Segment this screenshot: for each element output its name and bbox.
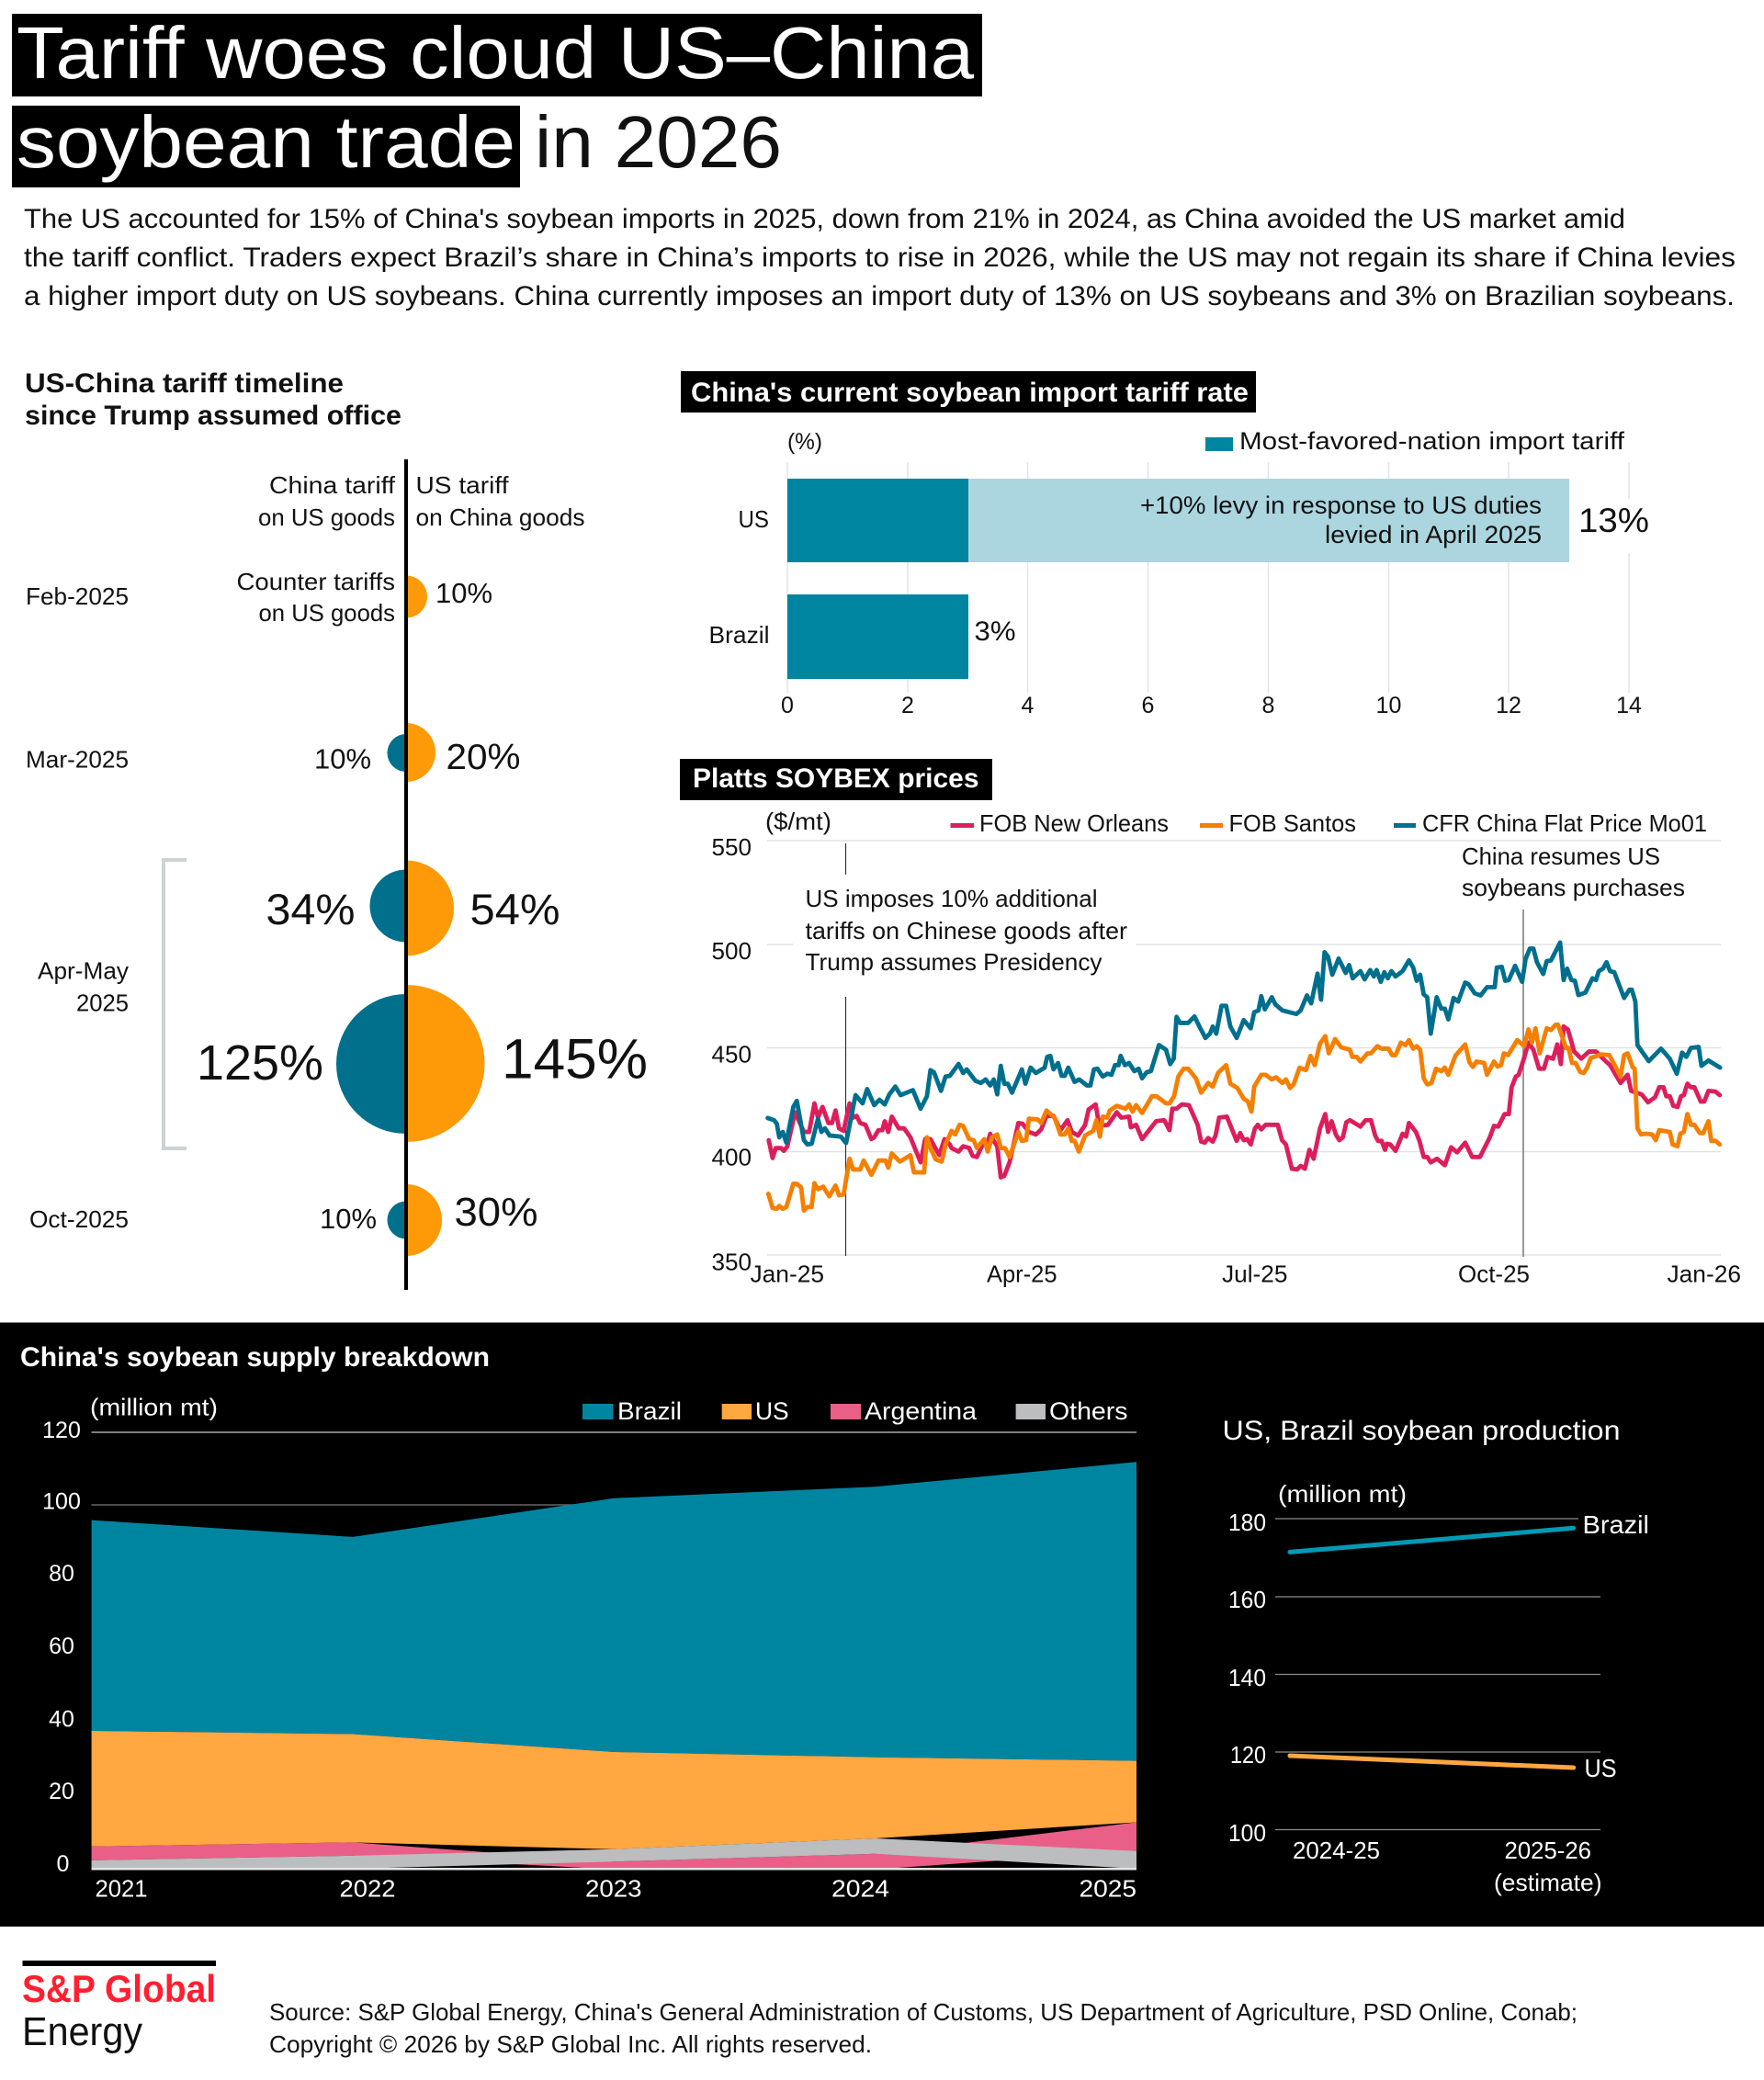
y axis labels: 350: [711, 1248, 752, 1275]
y axis labels: production: 120: [1230, 1741, 1266, 1769]
y axis labels: supply: 120: [42, 1418, 81, 1443]
marker: October: [1522, 910, 1524, 1257]
x axis labels: years: 2025: [1079, 1874, 1136, 1902]
percent values: 20%: [447, 738, 520, 777]
column headers: China tariff: [269, 471, 396, 499]
legend: price series: [950, 809, 1707, 837]
annotation: China resumes purchases: China resumes US: [1462, 842, 1660, 870]
x axis labels: Jul-25: [1222, 1260, 1288, 1288]
timeline axis: [404, 459, 408, 1290]
y axis labels: production: 100: [1228, 1819, 1266, 1847]
panel: import tariff rate bar chart: [681, 371, 1649, 718]
title: [12, 12, 982, 187]
series labels: [1582, 1510, 1649, 1782]
x axis labels: 14: [1616, 693, 1642, 718]
y axis labels: 500: [711, 937, 752, 965]
category labels: Brazil: [709, 621, 770, 649]
x axis labels: Jan-25: [750, 1260, 824, 1288]
x axis labels: Oct-25: [1458, 1260, 1530, 1288]
bar: US: [787, 479, 1569, 562]
x axis labels: 8: [1262, 693, 1274, 718]
timeline heading: US-China tariff timeline: [25, 368, 344, 399]
production chart: [1222, 1416, 1649, 1896]
bar annotation: [1140, 492, 1542, 548]
percent values: 145%: [502, 1027, 648, 1090]
x axis labels: years: [96, 1874, 1136, 1902]
title: in 2026: [535, 101, 782, 183]
logo: S&P Global Energy: [22, 1961, 216, 2054]
x axis labels: marketing years: 2025-26: [1505, 1837, 1591, 1864]
x axis labels: 6: [1142, 693, 1154, 718]
legend: supply origins: Brazil: [617, 1397, 682, 1425]
line: FOB Santos: [768, 1024, 1720, 1211]
x axis labels: [781, 693, 1642, 718]
intro text: [24, 204, 1736, 311]
percent values: 10%: [435, 577, 492, 609]
source note: [269, 1998, 1577, 2058]
zero line: [92, 1868, 1136, 1871]
column headers: on China goods: [415, 503, 584, 531]
y axis labels: supply: 40: [49, 1707, 74, 1733]
x axis labels: years: 2024: [831, 1874, 889, 1902]
heading: supply breakdown: China's soybean supply breakdown: [20, 1342, 490, 1373]
stacked area chart: [92, 1432, 1136, 1871]
value labels: [974, 502, 1649, 647]
annotation: US imposes tariffs: [805, 885, 1127, 976]
unit: production: (million mt): [1278, 1480, 1407, 1508]
date labels: Apr-May: [38, 957, 129, 985]
percent values: 30%: [454, 1190, 538, 1235]
legend: price series: FOB Santos: [1229, 809, 1356, 837]
area: Brazil: [92, 1462, 1136, 1761]
unit: ($/mt): [765, 808, 831, 835]
line: Brazil production: [1290, 1528, 1574, 1552]
bracket: Apr-May 2025: [164, 860, 187, 1148]
x axis labels: years: 2023: [585, 1874, 641, 1902]
logo: S&P Global Energy: S&P Global: [22, 1967, 216, 2010]
timeline heading: since Trump assumed office: [25, 401, 401, 431]
source note: Source: S&P Global Energy, China's General Administration of Customs, US Department of Agriculture, PSD Online, Conab;: [269, 1998, 1577, 2026]
line: CFR China: [768, 943, 1720, 1145]
line: FOB New Orleans: [769, 1026, 1720, 1177]
x axis labels: Jan-26: [1667, 1260, 1741, 1288]
unit label: (%): [787, 429, 822, 455]
counter tariff note: Counter tariffs: [237, 568, 395, 595]
y axis labels: 450: [711, 1040, 752, 1068]
x axis labels: 12: [1496, 693, 1521, 718]
annotation: China resumes purchases: [1462, 842, 1685, 901]
area: Argentina: [92, 1823, 1136, 1870]
date labels: Feb-2025: [26, 582, 129, 610]
column headers: US tariff: [415, 471, 509, 499]
timeline heading: [25, 368, 401, 431]
bar annotation: +10% levy in response to US duties: [1140, 492, 1542, 519]
intro text: a higher import duty on US soybeans. China currently imposes an import duty of 13% on US soybeans and 3% on Brazilian soybeans.: [24, 281, 1735, 311]
intro text: the tariff conflict. Traders expect Brazil’s share in China’s imports to rise in 2026, while the US may not regain its share if China levies: [24, 243, 1736, 273]
price lines: [768, 943, 1720, 1211]
x axis labels: 0: [781, 693, 794, 718]
column headers: [258, 471, 584, 531]
panel: SOYBEX line chart: [680, 759, 1741, 1288]
date labels: 2025: [76, 989, 129, 1016]
x axis labels: 2: [901, 693, 914, 718]
percent values: 34%: [266, 885, 355, 933]
x axis labels: marketing years: 2024-25: [1293, 1837, 1380, 1864]
event markers: [845, 843, 847, 1256]
date labels: Oct-2025: [29, 1205, 129, 1233]
half bubbles: China tariff: [336, 734, 406, 1238]
legend: price series: CFR China Flat Price Mo01: [1422, 809, 1707, 837]
annotation: US imposes tariffs: US imposes 10% additional: [805, 885, 1097, 912]
y axis labels: 550: [711, 833, 752, 861]
x axis labels: years: 2021: [96, 1874, 147, 1902]
heading: SOYBEX: Platts SOYBEX prices: [693, 763, 979, 794]
x axis labels: marketing years: (estimate): [1494, 1869, 1602, 1896]
y axis labels: [711, 833, 752, 1275]
line: US production: [1290, 1756, 1574, 1768]
area: Others: [92, 1838, 1136, 1869]
date labels: [26, 582, 129, 1233]
counter tariff note: on US goods: [259, 599, 395, 627]
bar annotation: levied in April 2025: [1325, 521, 1542, 548]
column headers: on US goods: [258, 503, 395, 531]
logo: S&P Global Energy: Energy: [22, 2009, 142, 2054]
percent values: 125%: [197, 1035, 323, 1091]
y axis labels: supply: [42, 1418, 81, 1877]
legend: supply origins: Others: [1049, 1397, 1128, 1425]
y axis labels: supply: 100: [42, 1488, 81, 1514]
percent values: [197, 577, 648, 1235]
value labels: 13%: [1578, 502, 1649, 539]
category labels: US: [739, 505, 769, 533]
x axis labels: years: 2022: [340, 1874, 395, 1902]
y axis labels: supply: 0: [57, 1851, 69, 1877]
annotation: US imposes tariffs: tariffs on Chinese goods after: [805, 917, 1127, 944]
x axis labels: marketing years: [1293, 1837, 1602, 1896]
category labels: [709, 505, 770, 649]
x axis labels: Apr-25: [987, 1260, 1057, 1288]
x axis labels: 4: [1022, 693, 1035, 718]
bar: Brazil: [787, 594, 968, 679]
percent values: 10%: [320, 1203, 377, 1235]
unit: million mt: (million mt): [90, 1393, 218, 1420]
heading: SOYBEX: [680, 759, 992, 800]
y axis labels: production: 180: [1228, 1509, 1266, 1536]
y axis labels: 400: [711, 1143, 752, 1170]
value labels: 3%: [974, 616, 1016, 647]
y axis labels: production: 160: [1228, 1586, 1266, 1613]
heading: tariff rate: [681, 371, 1256, 413]
legend: price series: FOB New Orleans: [979, 809, 1169, 837]
x axis labels: [750, 1260, 1741, 1288]
percent values: 10%: [314, 742, 371, 775]
y axis labels: production: [1228, 1509, 1266, 1847]
annotation: China resumes purchases: soybeans purchases: [1462, 874, 1685, 901]
heading: production: US, Brazil soybean production: [1222, 1416, 1621, 1446]
title: Tariff woes cloud US–China: [17, 12, 975, 94]
legend: supply origins: US: [755, 1397, 789, 1425]
series labels: US: [1584, 1754, 1617, 1782]
title: soybean trade: [17, 101, 515, 183]
counter tariff note: [237, 568, 395, 627]
panel: tariff timeline: [25, 368, 648, 1290]
panel: black supply section: [0, 1323, 1764, 1927]
y axis labels: supply: 80: [49, 1561, 74, 1587]
legend: supply origins: Argentina: [865, 1397, 978, 1425]
series labels: Brazil: [1582, 1510, 1649, 1539]
source note: Copyright © 2026 by S&P Global Inc. All rights reserved.: [269, 2030, 872, 2058]
date labels: Mar-2025: [26, 746, 129, 774]
annotation: US imposes tariffs: Trump assumes Presidency: [805, 948, 1102, 976]
x axis labels: 10: [1376, 693, 1401, 718]
area: US: [92, 1731, 1136, 1849]
percent values: 54%: [470, 885, 560, 933]
y axis labels: supply: 60: [49, 1633, 74, 1659]
y axis labels: supply: 20: [49, 1779, 74, 1804]
legend: supply origins: [582, 1397, 1128, 1425]
heading: tariff rate: China's current soybean import tariff rate: [691, 378, 1249, 408]
legend: most-favored-nation: Most-favored-nation import tariff: [1239, 427, 1625, 455]
half bubbles: US tariff: [406, 575, 485, 1256]
y axis labels: production: 140: [1228, 1664, 1266, 1691]
intro text: The US accounted for 15% of China's soybean imports in 2025, down from 21% in 2024, as China avoided the US market amid: [24, 204, 1625, 234]
